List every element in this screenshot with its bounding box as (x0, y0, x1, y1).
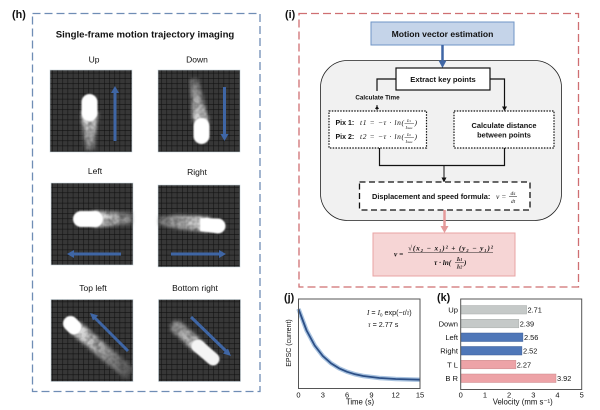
box: time formulas: Imax (404, 139, 413, 144)
box: time formulas (329, 111, 426, 148)
x tick labels (459, 390, 584, 400)
x tick labels (296, 390, 424, 400)
chart: EPSC decay (286, 299, 424, 406)
box: velocity equation: √(x₂ − x₁)² + (y₂ − y₁)² (408, 244, 494, 252)
box: motion vector estimation: Motion vector estimation (392, 29, 493, 39)
arrow: to time formulas (375, 105, 379, 110)
box: displacement and speed formula (360, 182, 530, 210)
bar: top left (447, 360, 531, 370)
x tick labels: 2 (507, 390, 511, 400)
connector: merge to formula (380, 148, 504, 182)
box: velocity equation: v = (394, 250, 403, 258)
label: calculate time: Calculate Time (355, 94, 400, 102)
arrow: to result (440, 210, 448, 233)
image: down (158, 54, 240, 152)
image: right: Right (187, 167, 208, 177)
equation: t/τ) (403, 308, 412, 317)
data scatter (298, 309, 420, 380)
box: extract key points: Extract key points (410, 75, 476, 84)
bar: left: 2.56 (524, 333, 538, 342)
box: time formulas: t2 = −τ · ln( (360, 132, 404, 141)
box: time formulas: Pix 1: (336, 120, 354, 127)
axes frame (461, 299, 582, 390)
box: time formulas: It2 (406, 132, 411, 137)
box: time formulas: It1 (406, 118, 411, 123)
box: motion vector estimation (371, 22, 514, 45)
bar: down (439, 319, 534, 328)
image: up: Up (89, 54, 100, 64)
image: bottom right: Bottom right (172, 283, 219, 293)
x axis title: Velocity (mm s⁻¹) (493, 398, 553, 406)
x tick labels: 15 (416, 390, 424, 400)
bar: bottom right: B R (445, 374, 459, 383)
fitted curve (298, 309, 420, 380)
x axis title: Time (s) (346, 398, 375, 406)
x tick labels: 0 (296, 390, 301, 400)
box: displacement and speed formula: Displacement and speed formula: (372, 192, 490, 201)
x tick labels: 9 (369, 390, 373, 400)
arrow: to key points (438, 45, 446, 68)
image: left: Left (88, 166, 103, 176)
bar: top left: 2.27 (517, 360, 531, 370)
box: velocity equation: It1 (456, 257, 462, 263)
box: time formulas: ) (414, 132, 418, 141)
bar: right (440, 346, 537, 356)
image: top left: Top left (79, 283, 107, 293)
box: time formulas: Imax (404, 125, 413, 130)
image: up (50, 54, 132, 152)
box: calculate distance: between points (477, 130, 531, 140)
bar: up: Up (448, 306, 458, 315)
bar: top left: T L (447, 360, 458, 370)
x tick labels: 3 (531, 390, 535, 400)
equation: 0 (380, 312, 383, 318)
image: left (51, 166, 133, 265)
image: down: Down (186, 54, 208, 64)
x tick labels: 5 (580, 390, 584, 400)
box: displacement and speed formula: ds (511, 191, 515, 197)
box: displacement and speed formula: v = (496, 192, 506, 201)
bar: up: 2.71 (528, 306, 542, 315)
y axis title: EPSC (current) (286, 319, 293, 367)
time constant: τ = 2.77 s (368, 320, 399, 329)
bar: right: Right (440, 347, 459, 356)
x tick labels: 6 (345, 390, 349, 400)
panel label: j: (j) (284, 292, 295, 304)
image: top left (51, 283, 133, 382)
box: time formulas: Pix 2: (336, 134, 354, 141)
heading: Single-frame motion trajectory imaging (56, 30, 234, 40)
box: extract key points (396, 68, 490, 90)
box: calculate distance: Calculate distance (472, 121, 536, 130)
x tick labels: 12 (392, 390, 400, 400)
image: bottom right (158, 283, 240, 382)
bar: down: 2.39 (520, 320, 534, 328)
connector: to calculate time (377, 79, 396, 91)
box: velocity equation (373, 233, 515, 276)
x tick labels: 0 (459, 390, 463, 400)
box: velocity equation: It2 (456, 264, 462, 270)
bar: left (445, 333, 538, 342)
box: calculate distance (454, 111, 554, 148)
panel label: k: (k) (437, 292, 451, 304)
x tick labels: 4 (555, 390, 560, 400)
axes frame (298, 299, 420, 388)
x tick labels: 1 (483, 390, 487, 400)
box: displacement and speed formula: dt (511, 199, 516, 205)
equation: exp(− (383, 308, 403, 317)
bar: bottom right (445, 374, 571, 383)
box: velocity equation: ) (463, 258, 466, 267)
bar: bottom right: 3.92 (557, 374, 571, 383)
box: velocity equation: τ · ln( (434, 258, 452, 267)
bar: right: 2.52 (523, 347, 537, 356)
panel: motion vector flowchart (299, 14, 578, 287)
box: time formulas: ) (414, 118, 418, 127)
panel label: i: (i) (285, 9, 296, 21)
box: time formulas: t1 = −τ · ln( (360, 118, 404, 127)
chart: velocity bars (439, 299, 584, 406)
equation: I = I (367, 308, 380, 317)
bar: left: Left (445, 333, 459, 342)
connector: to distance (490, 79, 507, 111)
x tick labels: 3 (321, 390, 325, 400)
panel: single-frame motion trajectory imaging (32, 14, 260, 392)
image: right (158, 167, 240, 267)
bar: up (448, 306, 542, 315)
gray process container (320, 60, 562, 220)
bar: down: Down (439, 320, 458, 328)
panel label: h: (h) (12, 9, 26, 21)
